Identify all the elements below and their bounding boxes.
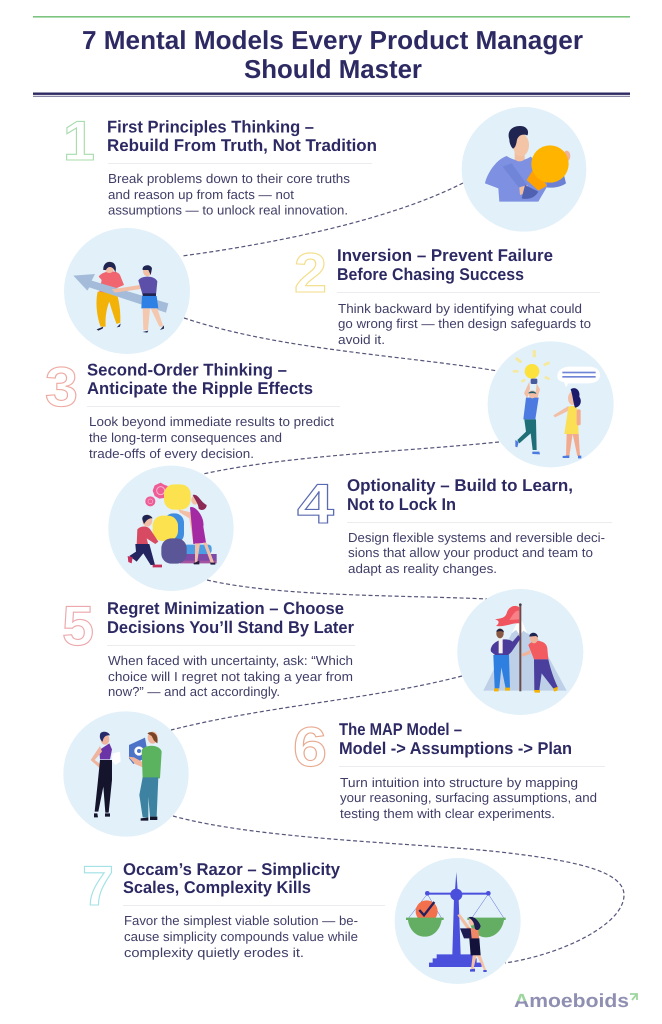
number 3: 3 [45, 355, 78, 418]
heading 3: Second-Order Thinking – [87, 360, 287, 380]
title [82, 25, 583, 84]
body 4: Design flexible systems and reversible deci- [348, 530, 605, 545]
body 5 [108, 653, 353, 699]
heading 6: Model -> Assumptions -> Plan [339, 739, 572, 758]
illustration 4: two people stacking shapes [108, 466, 234, 591]
title: 7 Mental Models Every Product Manager [82, 25, 583, 55]
heading 6 [339, 720, 572, 758]
heading 7 [123, 860, 341, 897]
body 6: Turn intuition into structure by mapping [340, 775, 578, 790]
heading 4: Optionality – Build to Learn, [347, 476, 573, 495]
body 2: go wrong first — then design safeguards to [338, 316, 591, 331]
heading 7: Scales, Complexity Kills [123, 878, 311, 897]
body 1: Break problems down to their core truths [108, 171, 351, 186]
step 4: optionality [297, 472, 612, 576]
illustration 1: person holding lightbulb [462, 107, 586, 232]
body 7: Favor the simplest viable solution — be- [124, 913, 358, 928]
number 1: 1 [63, 109, 95, 172]
illustration 5: two people planting a flag [457, 589, 583, 715]
heading 6: The MAP Model – [339, 720, 462, 739]
body 5: now?” — and act accordingly. [108, 684, 280, 699]
heading 3 [87, 360, 313, 398]
number 7: 7 [82, 854, 114, 917]
body 3: Look beyond immediate results to predict [89, 414, 334, 429]
body 1 [108, 171, 351, 218]
body 4 [348, 530, 605, 576]
body 2: avoid it. [338, 332, 385, 347]
number 5: 5 [62, 594, 94, 657]
heading 4: Not to Lock In [347, 495, 456, 514]
heading 5: Decisions You’ll Stand By Later [107, 618, 354, 637]
body 1: assumptions — to unlock real innovation. [108, 202, 348, 218]
number 4: 4 [297, 472, 334, 535]
body 7: cause simplicity compounds value while [124, 929, 358, 944]
body 5: choice will I regret not taking a year from [108, 669, 353, 684]
header [33, 16, 630, 97]
heading 7: Occam’s Razor – Simplicity [123, 860, 341, 879]
body 2 [338, 301, 591, 347]
body 4: sions that allow your product and team to [348, 545, 593, 560]
body 7 [124, 913, 358, 960]
body 6: your reasoning, surfacing assumptions, and [340, 790, 597, 805]
heading 3: Anticipate the Ripple Effects [87, 379, 313, 398]
step 7: Occam's razor [82, 854, 385, 960]
body 2: Think backward by identifying what could [338, 301, 582, 316]
heading 2: Inversion – Prevent Failure [337, 246, 553, 265]
step 3: second-order thinking [45, 355, 340, 461]
heading 1: Rebuild From Truth, Not Tradition [107, 136, 377, 155]
step 6: MAP model [293, 715, 605, 821]
logo: Amoeboids: Amoeboids [514, 991, 629, 1012]
heading 5 [107, 599, 354, 637]
heading 1: First Principles Thinking – [107, 118, 314, 136]
illustration 6: two people with gear card [63, 711, 189, 837]
body 3: the long-term consequences and [89, 430, 282, 445]
number 2: 2 [294, 241, 327, 304]
body 5: When faced with uncertainty, ask: “Which [108, 653, 353, 668]
body 1: and reason up from facts — not [108, 187, 294, 202]
illustration 7: balance scale and woman [395, 858, 521, 984]
illustration 3: two people with lightbulb and speech bubble [488, 341, 614, 467]
body 6 [340, 775, 597, 821]
body 4: adapt as reality changes. [348, 561, 497, 576]
illustration 2: two people carrying an arrow [64, 228, 190, 354]
heading 2 [337, 246, 553, 284]
heading 5: Regret Minimization – Choose [107, 599, 344, 618]
body 3 [89, 414, 334, 461]
step 5: regret minimization [62, 594, 355, 699]
title: Should Master [244, 54, 422, 84]
step 2: inversion [294, 241, 600, 347]
heading 1 [107, 118, 377, 155]
step 1: first principles [63, 109, 377, 218]
heading 4 [347, 476, 573, 514]
body 7: complexity quietly erodes it. [124, 945, 304, 960]
number 6: 6 [293, 715, 327, 778]
body 3: trade-offs of every decision. [89, 446, 254, 461]
heading 2: Before Chasing Success [337, 265, 524, 284]
connector: dashed paths between illustrations [171, 183, 624, 963]
body 6: testing them with clear experiments. [340, 806, 555, 821]
